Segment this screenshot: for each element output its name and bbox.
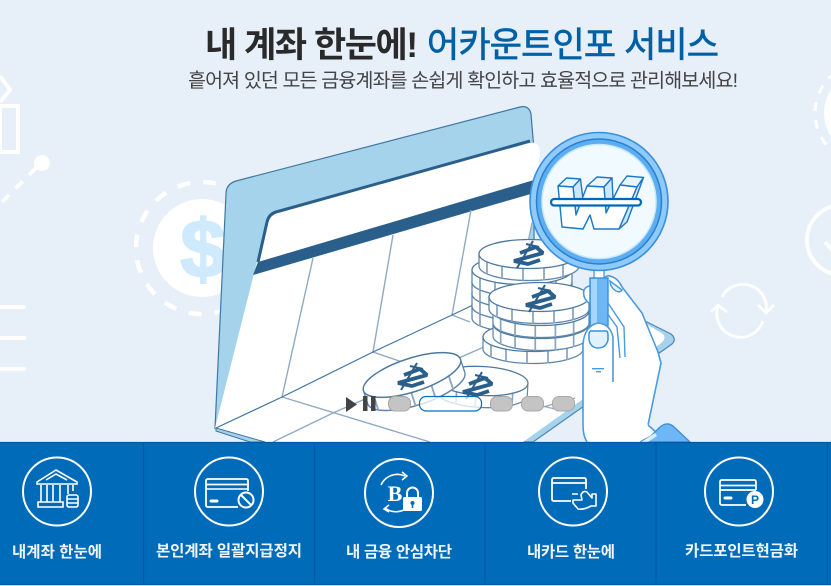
label: 내계좌 한눈에 [12, 543, 102, 561]
folder back panel [215, 107, 534, 428]
background icon: dollar coin: $ [180, 204, 226, 295]
slide indicator 1 [388, 396, 410, 411]
icon: lock and B coin: B [388, 481, 403, 506]
menu item: financial safety block [346, 459, 452, 561]
coin: flat on folder [435, 364, 529, 410]
thumbnail [589, 331, 608, 348]
folder lower lip [216, 428, 265, 442]
background icon: dashed line with dot [0, 155, 50, 204]
background icon: check circle [807, 205, 831, 275]
magnifier lens [530, 132, 668, 270]
illustration: hand with magnifying glass [530, 132, 690, 442]
title: 내 계좌 한눈에! [205, 26, 418, 65]
hand back and fingers [584, 276, 661, 442]
background icon: right dashed coin [815, 62, 831, 164]
background icon: list lines [0, 307, 24, 369]
folder floor edge [216, 305, 473, 428]
folder compartment lines [273, 210, 575, 442]
icon: bank [23, 458, 91, 526]
title: 어카운트인포 서비스 [427, 26, 719, 65]
folder front white panel [215, 143, 664, 442]
thumb [583, 323, 648, 442]
label: 본인계좌 일괄지급정지 [156, 542, 302, 560]
icon: card with point badge: P [751, 493, 759, 507]
coin stack: back [472, 240, 579, 333]
play button [346, 397, 357, 412]
menu item: suspend payments [156, 458, 302, 560]
coin: tilted on folder [358, 343, 470, 420]
bottom menu bar [0, 442, 831, 585]
folder dark top line [258, 141, 530, 262]
cuff [641, 433, 657, 442]
subtitle: 흩어져 있던 모든 금융계좌를 손쉽게 확인하고 효율적으로 관리해보세요! [188, 70, 738, 92]
menu item: card points to cash [685, 458, 798, 560]
menu item: my cards [527, 458, 615, 561]
background icon: dollar coin [136, 182, 268, 314]
background icon: refresh arrows [711, 284, 774, 337]
icon: blocked card [195, 458, 263, 526]
folder dark band [253, 180, 534, 275]
slide indicator 4 [522, 396, 544, 411]
coin stack: front [483, 282, 589, 364]
title [205, 26, 719, 65]
shadow under won symbol [562, 228, 620, 232]
finger creases [592, 303, 625, 372]
slide indicator 3 [490, 396, 512, 411]
magnifier handle [590, 269, 608, 330]
background icon: arrow and document [0, 76, 18, 152]
icon: card and hand [539, 458, 607, 526]
pause button [363, 396, 376, 411]
slider controls [346, 396, 574, 412]
illustration: folder with coins [215, 107, 674, 442]
slide indicator 2 active [420, 396, 482, 411]
menu item: my accounts [12, 458, 102, 561]
slide indicator 5 [552, 396, 574, 411]
label: 내카드 한눈에 [527, 543, 615, 561]
fingernail [610, 281, 622, 292]
sleeve [645, 424, 690, 442]
folder tray edge [523, 300, 674, 442]
won symbol in lens [551, 176, 644, 229]
label: 내 금융 안심차단 [346, 543, 452, 561]
label: 카드포인트현금화 [685, 542, 798, 560]
